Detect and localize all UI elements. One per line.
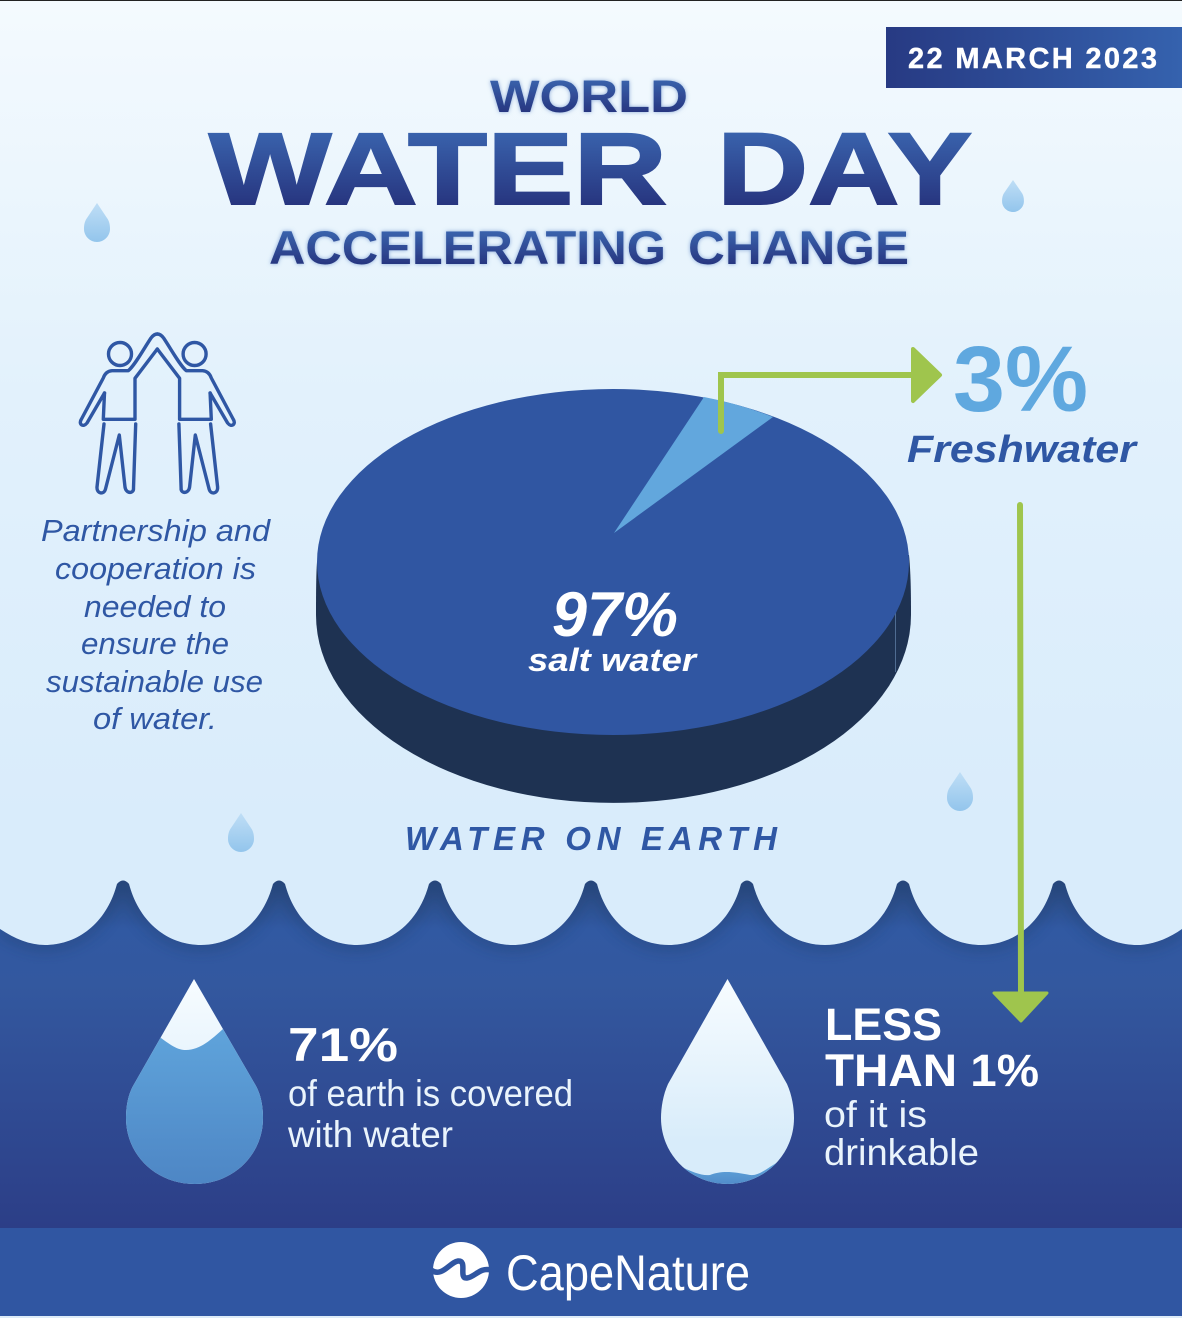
arrow: freshwater to drinkable — [994, 505, 1047, 1021]
text: partnership message: ensure the — [81, 626, 229, 661]
arrow: slice to freshwater — [721, 349, 940, 431]
label: Freshwater: Freshwater — [907, 429, 1138, 471]
icon: small water drop upper right — [1002, 180, 1024, 212]
stat: less than 1 percent: of it is — [824, 1094, 927, 1135]
value label: 97%: 97% — [552, 580, 678, 650]
icon: small water drop upper left — [84, 203, 110, 242]
icon: small water drop lower left — [228, 813, 254, 852]
footer bar — [0, 1228, 1182, 1318]
chart caption: WATER ON EARTH — [405, 820, 778, 857]
icon: water drop less than 1 percent — [660, 979, 800, 1190]
stat: 71 percent: of earth is covered — [288, 1073, 573, 1114]
stat: less than 1 percent: THAN 1% — [825, 1045, 1039, 1096]
water waves panel — [0, 880, 1182, 1230]
pie side seam — [895, 610, 896, 672]
stat: 71 percent: 71% — [288, 1018, 398, 1071]
title — [209, 71, 972, 274]
pie slice: freshwater — [614, 397, 773, 533]
text: partnership message: cooperation is — [55, 551, 256, 586]
stat: 71 percent — [287, 1018, 573, 1155]
icon: small water drop lower right — [947, 772, 973, 811]
icon: two people high five — [80, 334, 234, 493]
title line: Accelerating Change — [269, 221, 909, 274]
text: partnership message: of water. — [93, 701, 217, 736]
title line: Water Day — [209, 112, 972, 226]
pie top: salt water — [317, 389, 909, 735]
title line: Accelerating Change: CHANGE — [688, 221, 909, 274]
stat: 71 percent: with water — [287, 1114, 453, 1155]
chart: 3D pie of water on earth — [316, 389, 911, 803]
date badge — [886, 27, 1182, 88]
date badge: 22 MARCH 2023 — [908, 43, 1157, 75]
icon: CapeNature logo — [431, 1242, 491, 1298]
stat: less than 1 percent: LESS — [825, 999, 942, 1050]
label: salt water: salt water — [528, 642, 698, 678]
title line: World: WORLD — [490, 71, 688, 122]
stat: less than 1 percent: drinkable — [824, 1132, 979, 1173]
title line: Water Day: DAY — [717, 112, 972, 226]
pie side — [316, 555, 911, 803]
brand name: CapeNature — [506, 1245, 750, 1301]
title line: Water Day: WATER — [209, 112, 667, 226]
text: partnership message — [41, 513, 272, 736]
title line: Accelerating Change: ACCELERATING — [269, 221, 666, 274]
text: partnership message: sustainable use — [46, 664, 263, 699]
text: partnership message: Partnership and — [41, 513, 272, 548]
text: partnership message: needed to — [84, 589, 226, 624]
top edge line — [0, 0, 1182, 1]
value: 3%: 3% — [953, 327, 1088, 431]
stat: less than 1 percent — [824, 999, 1039, 1173]
icon: water drop 71 percent — [126, 979, 263, 1184]
